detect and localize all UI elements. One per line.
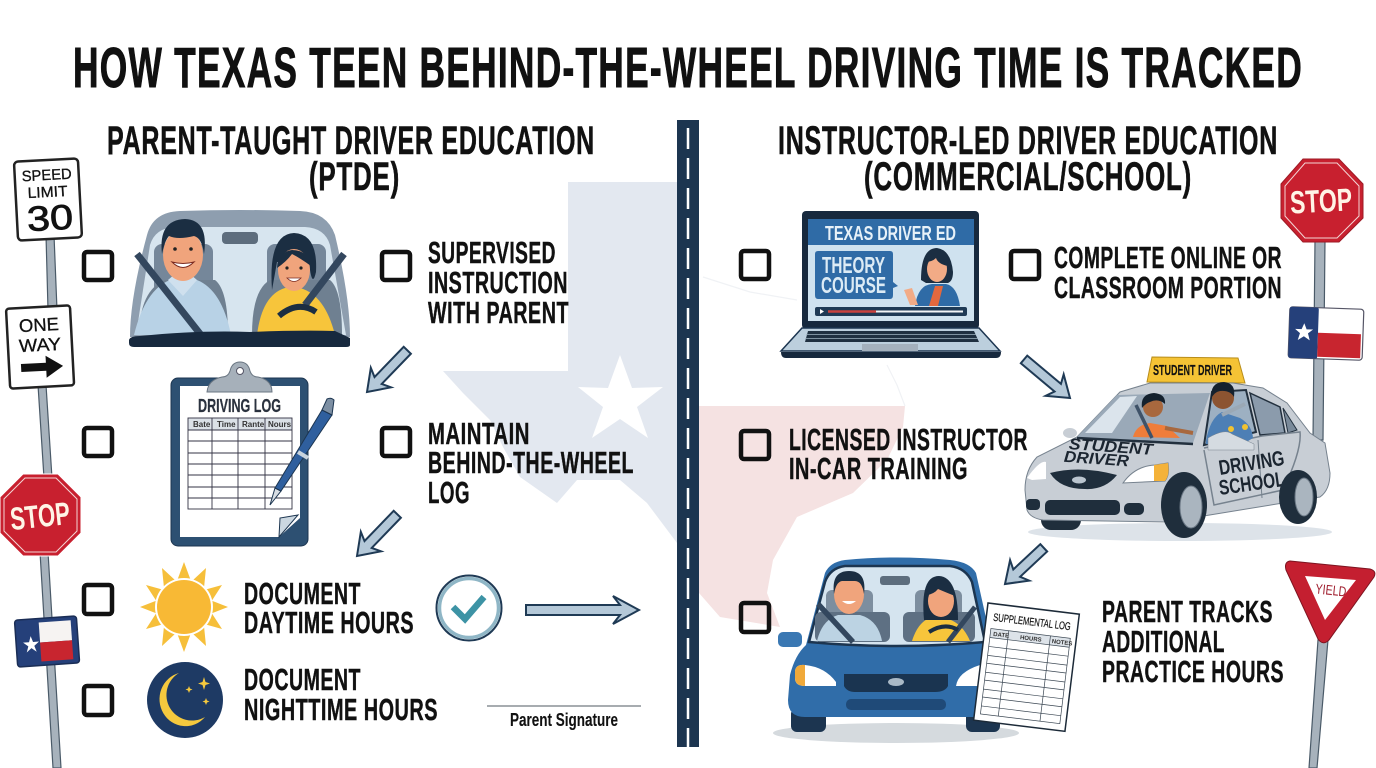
sign: speed limit 30: LIMIT <box>27 183 68 202</box>
right sign post column <box>1281 159 1375 768</box>
parent signature line: Parent Signature <box>510 710 618 730</box>
teacher figure <box>904 248 960 306</box>
text: daytime hours: DOCUMENT <box>244 576 361 611</box>
heading: parent-taught: PARENT-TAUGHT DRIVER EDUCATION <box>107 119 595 163</box>
checkbox supervised <box>382 252 410 280</box>
roof sign: STUDENT DRIVER <box>1153 362 1232 379</box>
text: maintain log: BEHIND-THE-WHEEL <box>428 445 634 480</box>
sign: speed limit 30 <box>14 158 82 241</box>
sign: speed limit 30: SPEED <box>21 166 72 185</box>
illustration: parent and teen in car interior <box>129 210 350 347</box>
icon: sun <box>140 562 228 652</box>
sign: stop right <box>1281 159 1363 242</box>
man figure <box>817 571 882 642</box>
heading: parent-taught <box>107 119 595 199</box>
checkbox 1 left <box>84 252 112 280</box>
supplemental log sheet: NOTES <box>1051 639 1073 648</box>
checkbox nighttime <box>84 686 112 715</box>
text: licensed instructor: IN-CAR TRAINING <box>789 451 968 486</box>
illustration: laptop theory course <box>781 211 1001 358</box>
background: Texas map silhouette <box>443 182 905 627</box>
sign: stop left <box>0 474 81 556</box>
heading: instructor-led <box>778 119 1278 199</box>
sign: stop right: STOP <box>1289 181 1353 221</box>
car hood text: STUDENT <box>1068 436 1155 459</box>
illustration: laptop theory course: TEXAS DRIVER ED <box>825 223 956 245</box>
sign: Texas flag right <box>1288 307 1364 360</box>
checkbox supplemental <box>741 603 769 632</box>
text: supervised instruction: SUPERVISED <box>428 235 556 270</box>
sign: speed limit 30: 30 <box>26 198 74 239</box>
icon: moon <box>147 662 223 738</box>
supplemental log sheet <box>974 603 1079 731</box>
text: maintain log <box>428 416 634 510</box>
checkbox 2 left <box>84 428 112 456</box>
supplemental log sheet: HOURS <box>1020 635 1042 644</box>
text: supervised instruction: INSTRUCTION <box>428 265 568 300</box>
door text <box>1217 447 1286 500</box>
sign: stop left: STOP <box>8 495 72 537</box>
text: parent tracks <box>1102 594 1284 689</box>
student figure <box>1133 393 1193 438</box>
sign: yield <box>1286 561 1375 768</box>
heading: instructor-led: (COMMERCIAL/SCHOOL) <box>864 155 1192 199</box>
arrow: to hours <box>347 505 407 566</box>
door text: SCHOOL <box>1217 468 1286 500</box>
instructor figure <box>1206 382 1254 450</box>
arrow: to blue car <box>995 538 1053 594</box>
car wheels <box>1161 470 1317 538</box>
text: nighttime hours: DOCUMENT <box>244 662 361 697</box>
sign: one way <box>6 305 74 389</box>
illustration: driving log clipboard: Nours <box>268 420 292 429</box>
door text: DRIVING <box>1217 447 1286 480</box>
heading: parent-taught: (PTDE) <box>309 155 400 199</box>
text: daytime hours <box>244 576 414 640</box>
text: maintain log: LOG <box>428 475 470 510</box>
text: complete online <box>1054 240 1282 305</box>
text: nighttime hours: NIGHTTIME HOURS <box>244 692 438 727</box>
supplemental log sheet: DATE <box>993 632 1009 640</box>
illustration: driving log clipboard: Rante <box>242 420 265 429</box>
sign: Texas flag left <box>14 616 80 667</box>
icon: pen <box>270 398 334 505</box>
text: licensed instructor: LICENSED INSTRUCTOR <box>789 422 1028 457</box>
panel: parent-taught steps <box>84 210 641 738</box>
text: nighttime hours <box>244 662 438 727</box>
checkbox in-car <box>741 431 769 459</box>
text: licensed instructor <box>789 422 1028 486</box>
text: supervised instruction: WITH PARENT <box>428 295 569 330</box>
illustration: blue family car with log <box>773 558 1079 743</box>
illustration: driving log clipboard: DRIVING LOG <box>198 396 281 416</box>
illustration: driving log clipboard: Time <box>217 420 236 429</box>
text: parent tracks: ADDITIONAL <box>1102 624 1225 659</box>
left sign post column <box>0 158 82 768</box>
text: maintain log: MAINTAIN <box>428 416 530 451</box>
sign: one way: WAY <box>18 334 61 356</box>
icon: check badge <box>436 576 502 640</box>
sign: one way: ONE <box>18 314 59 336</box>
illustration: driving school car <box>1025 357 1332 541</box>
supplemental log sheet: SUPPLEMENTAL LOG <box>993 612 1071 633</box>
roof sign <box>1147 357 1245 383</box>
illustration: laptop theory course: THEORY <box>822 252 885 278</box>
checkbox complete online <box>1011 251 1039 279</box>
text: parent tracks: PARENT TRACKS <box>1102 594 1273 629</box>
center road divider <box>677 120 699 747</box>
checkbox theory <box>741 251 769 279</box>
text: supervised instruction <box>428 235 569 330</box>
woman figure <box>912 576 975 642</box>
panel: instructor-led steps <box>741 159 1375 768</box>
checkbox daytime <box>84 585 112 614</box>
car hood text: DRIVER <box>1063 449 1130 470</box>
sign: yield: YIELD <box>1315 580 1347 600</box>
illustration: driving log clipboard <box>171 362 334 546</box>
text: daytime hours: DAYTIME HOURS <box>244 605 414 640</box>
checkbox maintain log <box>382 428 410 456</box>
arrow: to school car <box>1015 349 1079 409</box>
arrow: to driving log <box>357 341 417 402</box>
car hood text <box>1063 436 1155 472</box>
illustration: laptop theory course: COURSE <box>821 272 886 298</box>
illustration: driving log clipboard: Bate <box>193 420 211 429</box>
arrow: across to instructor-led <box>526 596 639 624</box>
